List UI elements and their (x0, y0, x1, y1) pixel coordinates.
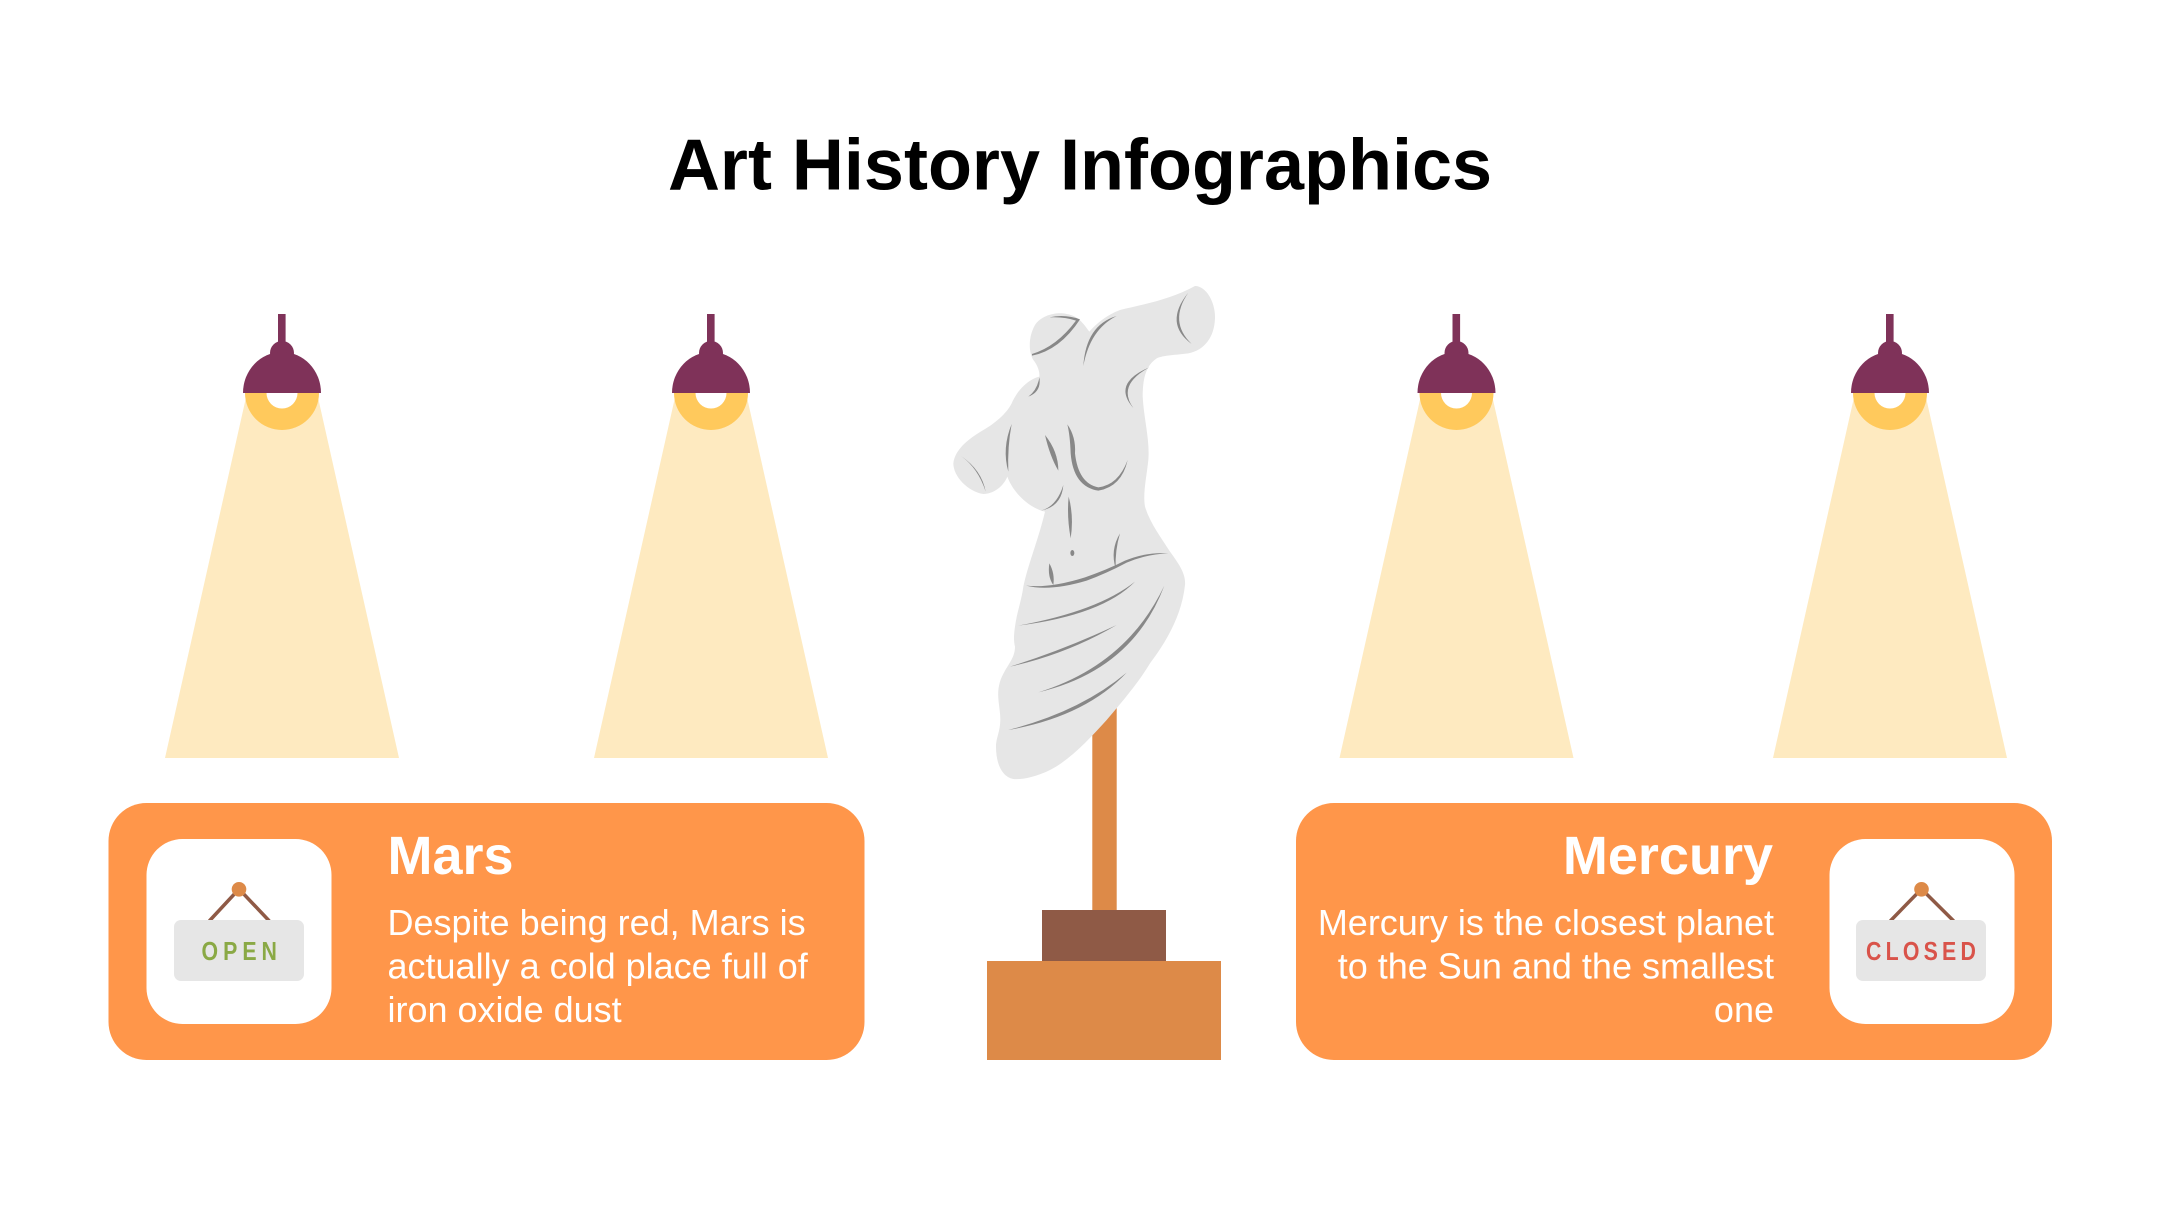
text: Mercury description: Mercury is the closest planet (1318, 902, 1774, 943)
icon: closed sign (1830, 839, 2014, 1024)
heading: Mercury: Mercury (1563, 826, 1773, 886)
pedestal upper block (1042, 910, 1166, 961)
pedestal base (987, 961, 1221, 1060)
panel background (1296, 803, 2052, 1060)
icon: open sign (146, 839, 332, 1024)
icon: spotlight lamp 3 (1340, 314, 1574, 758)
statue on pedestal (953, 286, 1221, 1060)
icon: spotlight lamp 1 (165, 314, 399, 758)
panel: Mercury (1296, 803, 2052, 1060)
title: Art History Infographics (668, 126, 1492, 206)
icon: spotlight lamp 4 (1773, 314, 2007, 758)
text: Mercury description: one (1714, 989, 1774, 1030)
text: Mars description: actually a cold place full of (388, 946, 809, 986)
icon: spotlight lamp 2 (594, 314, 828, 758)
pedestal pole (1092, 700, 1117, 912)
panel: Mars (108, 803, 864, 1060)
text: Mars description: Despite being red, Mars is (388, 902, 806, 943)
icon: closed sign: CLOSED (1866, 937, 1976, 967)
icon: open sign: OPEN (202, 937, 277, 967)
text: Mars description: iron oxide dust (388, 989, 622, 1030)
panel background (108, 803, 864, 1060)
heading: Mars: Mars (388, 826, 514, 886)
torso sculpture (953, 286, 1215, 779)
text: Mercury description: to the Sun and the smallest (1338, 946, 1774, 986)
